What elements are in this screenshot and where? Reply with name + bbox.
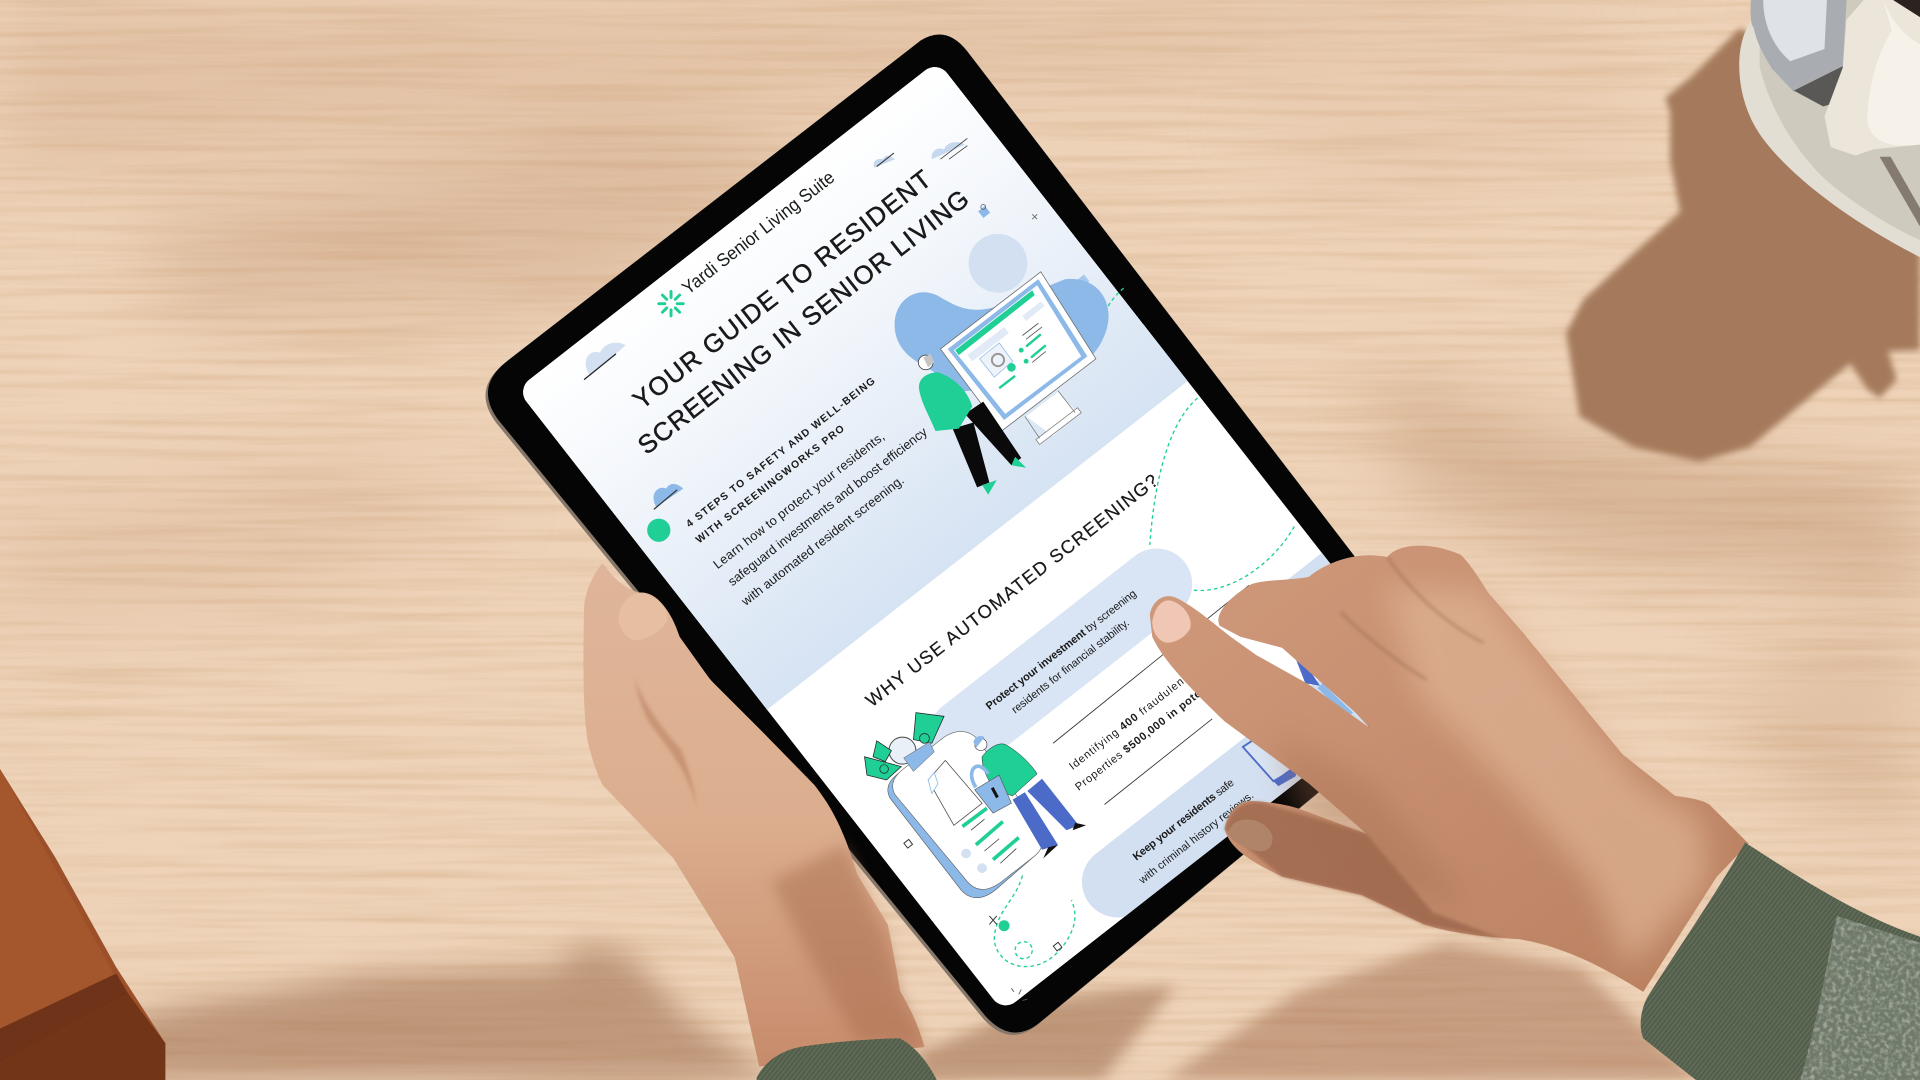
blue blob xyxy=(895,279,1109,392)
tablet screen xyxy=(523,67,1368,1006)
subtitle heading: WITH SCREENINGWORKS PRO xyxy=(694,424,847,546)
padlock xyxy=(975,775,1011,813)
saucer xyxy=(1739,0,1920,257)
cup xyxy=(1824,0,1920,156)
section heading: WHY USE AUTOMATED SCREENING? xyxy=(861,470,1162,711)
clip xyxy=(889,737,916,764)
keep residents safe text: Keep your residents safe xyxy=(1131,777,1237,863)
monitor xyxy=(940,272,1096,431)
spoon xyxy=(1751,0,1847,92)
phone xyxy=(888,733,1043,898)
small decorations xyxy=(904,839,1062,1000)
green dot marker xyxy=(647,519,670,542)
logo xyxy=(659,166,838,316)
logo wordmark: Yardi Senior Living Suite xyxy=(678,166,838,298)
person torso xyxy=(982,744,1037,796)
person legs xyxy=(1013,779,1079,850)
cup shadow xyxy=(1566,28,1920,462)
index nail xyxy=(1152,600,1191,643)
left hand xyxy=(583,563,924,1067)
pill: right side partial xyxy=(1288,552,1330,580)
intro text: Learn how to protect your residents, xyxy=(710,429,887,572)
statistic text: Properties $500,000 in potential loss xyxy=(1073,655,1245,793)
monitor content xyxy=(955,290,1035,355)
clouds xyxy=(584,138,1089,509)
hero section gradient xyxy=(517,61,1188,710)
left sleeve xyxy=(757,1038,937,1080)
lit back of hand xyxy=(1384,588,1708,967)
illustration: partial laptop and person xyxy=(1243,647,1353,786)
list lines xyxy=(962,808,1019,860)
right hand xyxy=(1150,546,1749,992)
dashed connectors xyxy=(994,288,1294,967)
wrist shadow xyxy=(771,845,924,1047)
thumb nail xyxy=(1228,820,1273,851)
illustration: person at monitor xyxy=(895,234,1109,495)
right sleeve xyxy=(1641,842,1920,1080)
protect investment text: Protect your investment by screening xyxy=(984,588,1139,713)
person xyxy=(953,402,1021,487)
intro text: with automated resident screening. xyxy=(738,472,907,609)
monitor stand xyxy=(1026,392,1078,436)
thumb nail xyxy=(618,593,667,640)
palm crease xyxy=(634,677,698,811)
title: YOUR GUIDE TO RESIDENT xyxy=(628,165,937,415)
statistic text: Identifying 400 fraudulent applicants xyxy=(1067,635,1239,773)
dividers xyxy=(1053,585,1249,804)
title: SCREENING IN SENIOR LIVING xyxy=(633,185,974,460)
pill: keep residents safe xyxy=(1082,680,1368,918)
intro text: safeguard investments and boost efficiency xyxy=(725,424,930,589)
protect investment text: residents for financial stability. xyxy=(1010,617,1132,716)
saucer and coffee cup xyxy=(1739,0,1920,257)
tablet body xyxy=(485,34,1435,1035)
finger separators xyxy=(1341,557,1484,680)
document xyxy=(928,760,982,825)
subtitle heading: 4 STEPS TO SAFETY AND WELL-BEING xyxy=(684,376,877,530)
shaded thumb side xyxy=(1224,802,1506,940)
keep residents safe text: with criminal history reviews. xyxy=(1136,790,1256,887)
illustration: phone, money and person with lock xyxy=(864,713,1086,898)
notebook xyxy=(0,769,165,1080)
logo mark xyxy=(659,291,683,316)
pill: protect investment xyxy=(930,548,1192,752)
money xyxy=(864,713,944,780)
pale circle xyxy=(969,234,1027,293)
bottom shadows on table xyxy=(122,943,1702,1080)
